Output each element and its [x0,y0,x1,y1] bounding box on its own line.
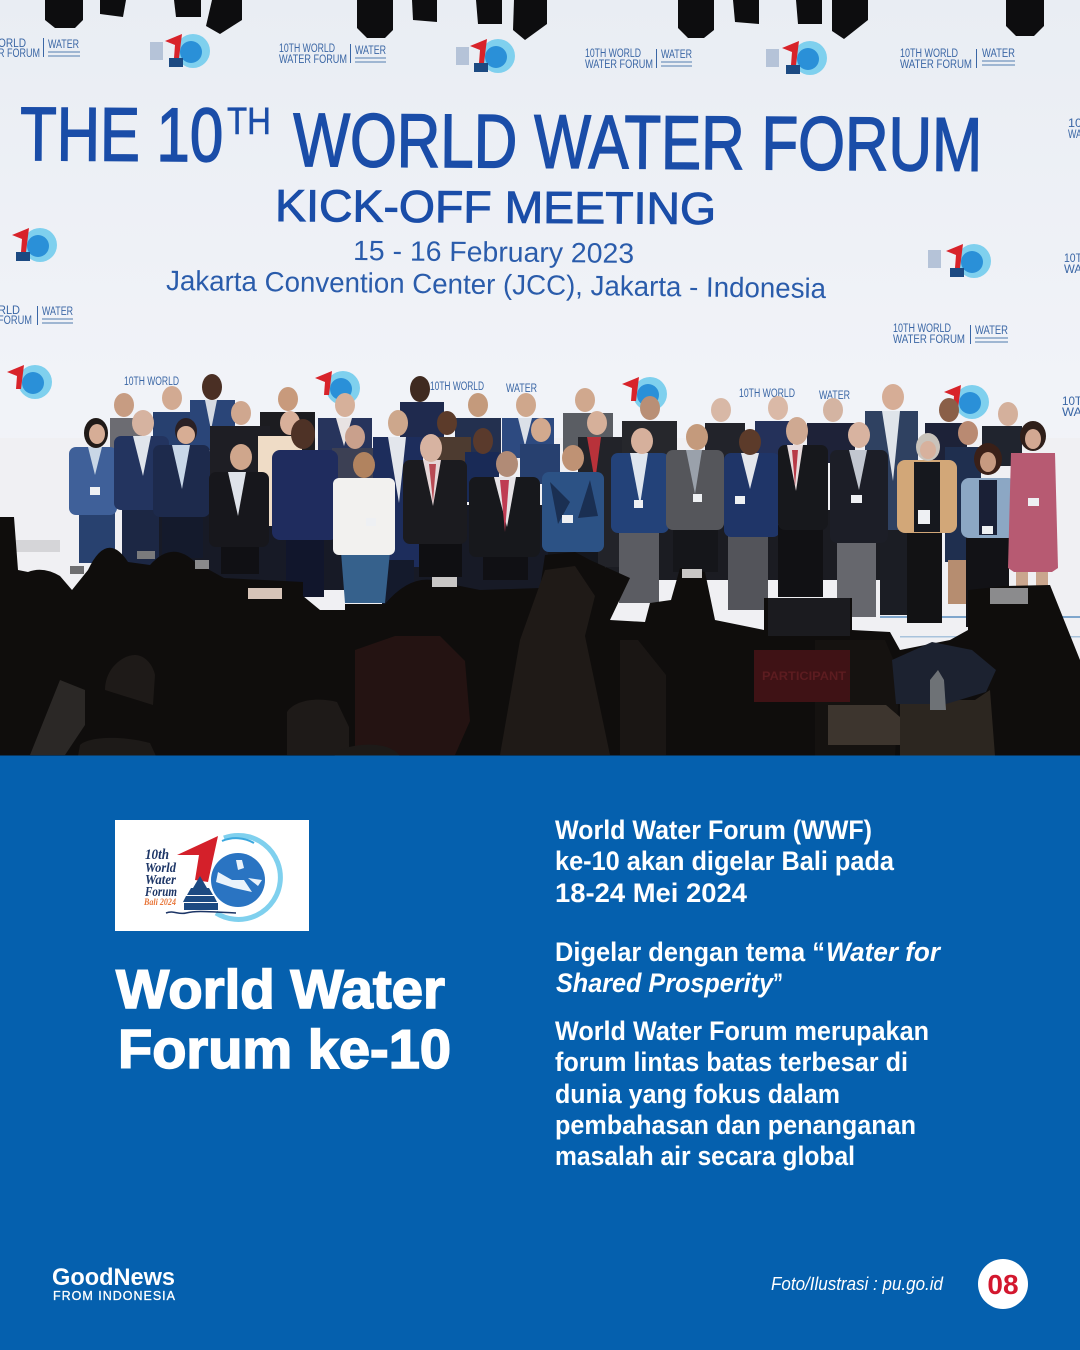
lanyard badges [90,487,1039,534]
delegate in tan jacket [897,433,957,623]
text block: event date: 18-24 Mei 2024 [555,878,747,908]
text block: forum description [555,1016,929,1171]
text block: event date [555,815,895,908]
backdrop repeated wordmarks: WATER FORUM [900,59,972,71]
backdrop repeated wordmarks: 10TH WORLD [739,388,795,400]
backdrop repeated mini logos [7,34,991,419]
event logo on white card: Bali 2024 [143,897,176,907]
text block: event theme: Water for [826,937,941,967]
event logo on white card: World [145,861,177,876]
event logo on white card [115,820,309,931]
text block: forum description: World Water Forum merupakan [555,1016,929,1046]
page number badge [978,1259,1028,1309]
delegates: back row [110,374,1022,615]
backdrop repeated wordmarks: WATER [975,325,1008,337]
text block: event theme [555,937,941,998]
backdrop repeated wordmarks: 10TH WORLD [124,376,179,388]
stage spotlights [45,0,1044,40]
heading [116,958,451,1080]
backdrop date and venue: Jakarta Convention Center (JCC), Jakarta - Indonesia [166,265,827,304]
delegates: front row [69,410,1058,627]
text block: event theme: Shared Prosperity [556,968,775,998]
backdrop repeated wordmarks: WATER FORUM [585,59,653,71]
backdrop repeated wordmarks: 10TH WORLD [893,323,951,335]
page number badge: 08 [987,1269,1019,1300]
brand logo: GoodNews from Indonesia: FROM INDONESIA [53,1289,176,1303]
backdrop repeated wordmarks: 10TH WORLD [585,48,641,60]
backdrop date and venue [166,235,827,304]
text block: forum description: masalah air secara global [555,1141,855,1171]
backdrop headline: The 10th World Water Forum: THE 10 [20,92,223,178]
backdrop repeated wordmarks: WATER [661,49,692,61]
backdrop headline: The 10th World Water Forum [20,92,982,188]
participant monitor and chair placard: PARTICIPANT [762,669,847,683]
delegates: middle row [210,401,981,610]
photo credit: Foto/Ilustrasi : pu.go.id [771,1274,944,1294]
backdrop repeated wordmarks: WATER FORUM [893,334,965,346]
delegate in pink floral dress [1008,421,1058,587]
stage floor [0,438,1080,678]
backdrop date and venue: 15 - 16 February 2023 [353,235,634,269]
audience phone screens [70,551,1028,604]
brand logo: GoodNews from Indonesia [52,1264,176,1303]
text block: forum description: dunia yang fokus dalam [555,1079,840,1109]
heading: Forum ke-10 [118,1018,451,1080]
text block: event theme: ” [773,968,783,998]
text block: event date: ke-10 akan digelar Bali pada [555,846,895,876]
text block: event date: World Water Forum (WWF) [555,815,872,845]
audience silhouettes [0,517,1080,756]
backdrop repeated wordmarks: 10TH WORLD [900,48,958,60]
event logo on white card: 10th [145,847,169,863]
delegate in batik shirt [542,445,604,572]
participant monitor and chair placard [754,598,850,702]
event logo on white card: Water [145,873,176,888]
stage backdrop [0,0,1080,756]
event logo on white card: Forum [144,885,177,900]
backdrop subtitle: kick-off meeting: KICK-OFF MEETING [275,180,716,234]
backdrop repeated wordmarks: WATER FORUM [279,54,347,66]
photo: forum stage with delegates and audience [0,0,1080,756]
heading: World Water [116,958,445,1020]
delegate in blue-grey jacket [961,443,1016,627]
text block: forum description: forum lintas batas terbesar di [555,1047,908,1077]
text block: event theme: Digelar dengan tema “ [555,937,825,967]
backdrop repeated wordmarks: WA [1062,407,1080,419]
delegate in white batik shirt and sarong [333,452,395,603]
backdrop repeated wordmarks: 10TH WORLD [430,381,484,393]
audience seats and lit backs [30,566,996,756]
backdrop repeated wordmarks: WATER [819,390,850,402]
text block: forum description: pembahasan dan penanganan [555,1110,916,1140]
backdrop repeated wordmarks [0,38,1080,419]
backdrop headline: The 10th World Water Forum: TH [227,101,271,143]
brand logo: GoodNews from Indonesia: GoodNews [52,1264,175,1291]
backdrop repeated wordmarks: 10TH WORLD [279,43,335,55]
delegate in blue suit, left [69,418,117,563]
backdrop repeated wordmarks: WATER [48,39,79,51]
panel: blue information area [0,756,1080,1350]
backdrop repeated wordmarks: WATER [506,383,537,395]
backdrop repeated wordmarks: WATER [42,306,73,318]
backdrop repeated wordmarks: WATER [355,45,386,57]
backdrop repeated wordmarks: WATER [982,48,1015,60]
